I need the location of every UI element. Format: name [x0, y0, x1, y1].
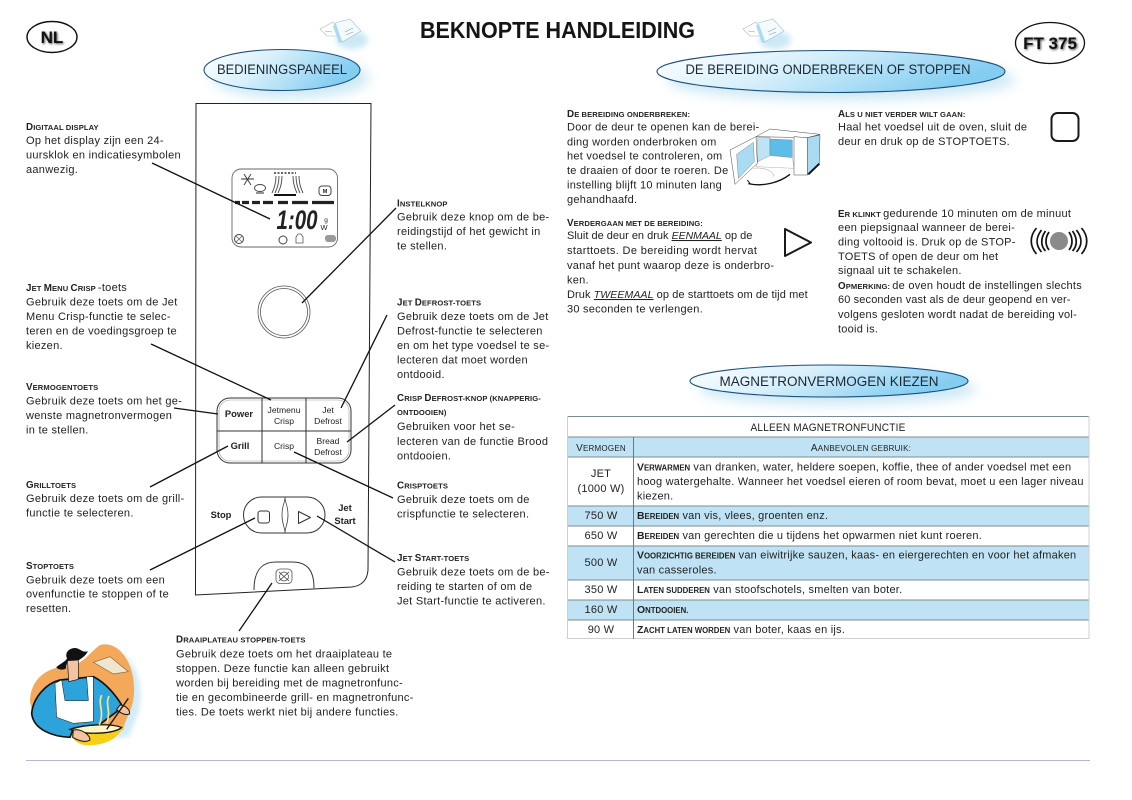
button block: Defrost: [314, 416, 342, 426]
stop and start buttons: Jet: [338, 502, 352, 513]
text: verdergaan met de bereiding: starttoets. De bereiding wordt hervat: [567, 245, 757, 257]
text: crisptoets: CRISPTOETS: [397, 480, 448, 492]
text: stoptoets: [26, 561, 169, 615]
heading pill: bedieningspaneel: BEDIENINGSPANEEL: [217, 62, 347, 78]
table: alleen magnetronfunctie: LATEN SUDDEREN van stoofschotels, smelten van boter.: [637, 584, 902, 596]
stop and start buttons: [211, 497, 356, 533]
text: digitaal display: [26, 122, 181, 176]
text: stoptoets: STOPTOETS: [26, 561, 74, 572]
text: vermogentoets: in te stellen.: [26, 424, 89, 436]
text: er klinkt: 60 seconden vast als de deur geopend en ver-: [838, 294, 1071, 306]
text: jet menu crisp-toets: kiezen.: [26, 340, 63, 352]
text: als u niet verder wilt gaan: deur en druk op de STOPTOETS.: [838, 136, 1010, 148]
table: alleen magnetronfunctie: ZACHT LATEN WORDEN van boter, kaas en ijs.: [637, 624, 845, 636]
text: vermogentoets: Gebruik deze toets om het ge-: [26, 396, 182, 408]
button block: [217, 398, 351, 463]
illustration: chef stirring a bowl: [30, 644, 141, 745]
text: jet menu crisp-toets: JET MENU CRISP -toets: [26, 282, 127, 294]
text: vermogentoets: [25, 382, 182, 436]
text: instelknop: reidingstijd of het gewicht in: [397, 226, 541, 238]
language badge: NL: NL: [41, 28, 63, 47]
icon: open book left: [320, 19, 368, 49]
text: instelknop: Gebruik deze knop om de be-: [397, 212, 550, 224]
icon: beep signal: [1031, 228, 1087, 254]
text: digitaal display: aanwezig.: [26, 164, 78, 176]
text: verdergaan met de bereiding: VERDERGAAN MET DE BEREIDING:: [567, 218, 703, 229]
text: draaiplateau stoppen-toets: ties. De toets werkt niet bij andere functies.: [176, 706, 399, 718]
display: g: [324, 217, 328, 224]
text: crisptoets: [397, 480, 530, 520]
text: crisptoets: crispfunctie te selecteren.: [397, 508, 529, 520]
text: als u niet verder wilt gaan: ALS U NIET VERDER WILT GAAN:: [838, 109, 965, 120]
text: jet defrost-toets: Defrost-functie te selecteren: [397, 326, 543, 338]
text: er klinkt: volgens gesloten wordt nadat de bereiding vol-: [838, 309, 1077, 321]
language badge: NL: NL: [42, 29, 64, 48]
text: crisp defrost-knop: CRISP DEFROST-KNOP (KNAPPERIG-: [397, 393, 541, 404]
icon: start triangle: [785, 229, 811, 256]
icon: stop square: [1052, 113, 1078, 141]
table: alleen magnetronfunctie: 650 W: [585, 530, 618, 542]
text: vermogentoets: wenste magnetronvermogen: [25, 410, 172, 422]
table: alleen magnetronfunctie: VERWARMEN van dranken, water, heldere soepen, koffie, thee of ander voedsel met een: [637, 462, 1071, 474]
text: er klinkt: ER KLINKT gedurende 10 minuten om de minuut: [838, 208, 1071, 220]
table: alleen magnetronfunctie: BEREIDEN van vis, vlees, groenten enz.: [637, 510, 828, 522]
text: jet start-toets: reiding te starten of om de: [397, 581, 532, 593]
turntable button: [254, 562, 314, 590]
table: alleen magnetronfunctie: VERMOGEN: [576, 443, 626, 454]
text: stoptoets: ovenfunctie te stoppen of te: [26, 588, 169, 600]
text: draaiplateau stoppen-toets: Gebruik deze toets om het draaiplateau te: [176, 648, 392, 660]
text: draaiplateau stoppen-toets: worden bij bereiding met de magnetronfunc-: [175, 678, 403, 690]
text: draaiplateau stoppen-toets: stoppen. Deze functie kan alleen gebruikt: [176, 663, 389, 675]
table: alleen magnetronfunctie: van casseroles.: [637, 564, 717, 576]
text: de bereiding onderbreken: het voedsel te controleren, om: [567, 150, 722, 162]
text: digitaal display: uursklok en indicatiesymbolen: [26, 150, 181, 162]
text: grilltoets: GRILLTOETS: [26, 480, 76, 491]
button block: Grill: [231, 440, 249, 451]
stop and start buttons: Stop: [211, 509, 232, 520]
model badge: FT 375: FT 375: [1024, 35, 1078, 54]
text: de bereiding onderbreken: instelling blijft 10 minuten lang: [567, 180, 722, 192]
text: als u niet verder wilt gaan: [838, 109, 1027, 148]
button block: Jetmenu: [268, 405, 301, 415]
text: jet start-toets: JET START-TOETS: [397, 553, 469, 564]
table row bands: [567, 416, 1089, 639]
text: jet defrost-toets: lecteren dat moet worden: [397, 354, 528, 366]
table: alleen magnetronfunctie: BEREIDEN van gerechten die u tijdens het opwarmen niet kunt roeren.: [637, 530, 982, 542]
text: stoptoets: Gebruik deze toets om een: [26, 574, 165, 586]
text: er klinkt: een piepsignaal wanneer de berei-: [838, 222, 1015, 234]
text: jet defrost-toets: [397, 298, 549, 381]
text: er klinkt: signaal uit te schakelen.: [838, 265, 962, 277]
text: de bereiding onderbreken: Door de deur te openen kan de berei-: [567, 122, 760, 134]
icon: open book right: [743, 19, 791, 49]
text: vermogentoets: VERMOGENTOETS: [26, 382, 98, 393]
heading pill: de bereiding onderbreken of stoppen: DE BEREIDING ONDERBREKEN OF STOPPEN: [686, 62, 970, 78]
table: alleen magnetronfunctie: JET: [591, 468, 611, 480]
text: jet start-toets: Gebruik deze toets om de be-: [397, 566, 550, 578]
text: er klinkt: ding voltooid is. Druk op de STOP-: [838, 236, 1016, 248]
text: instelknop: [397, 198, 550, 252]
text: jet start-toets: Jet Start-functie te activeren.: [397, 596, 546, 608]
text: crisp defrost-knop: lecteren van de functie Brood: [397, 436, 548, 448]
text: instelknop: INSTELKNOP: [397, 198, 448, 210]
text: crisp defrost-knop: [397, 393, 548, 462]
leader lines: [150, 163, 396, 631]
text: draaiplateau stoppen-toets: tie en gecombineerde grill- en magnetronfunc-: [176, 692, 414, 704]
knob: [258, 286, 310, 338]
text: verdergaan met de bereiding: ken.: [567, 274, 589, 286]
text: jet menu crisp-toets: teren en de voedingsgroep te: [26, 326, 177, 338]
table: alleen magnetronfunctie: 750 W: [585, 510, 618, 522]
text: jet defrost-toets: ontdooid.: [397, 369, 445, 381]
text: jet menu crisp-toets: [26, 282, 178, 352]
text: jet defrost-toets: JET DEFROST-TOETS: [397, 298, 481, 308]
text: grilltoets: [26, 480, 185, 520]
control panel drawing: [196, 104, 371, 595]
text: verdergaan met de bereiding: Druk TWEEMAAL op de starttoets om de tijd met: [567, 289, 808, 301]
text: jet menu crisp-toets: Gebruik deze toets om de Jet: [26, 296, 178, 308]
table: alleen magnetronfunctie: [567, 416, 1089, 639]
text: de bereiding onderbreken: DE BEREIDING ONDERBREKEN:: [567, 109, 690, 120]
button block: Jet: [322, 405, 334, 415]
stop and start buttons: Start: [334, 515, 356, 526]
text: draaiplateau stoppen-toets: DRAAIPLATEAU STOPPEN-TOETS: [176, 634, 306, 646]
text: crisp defrost-knop: ONTDOOIEN): [397, 408, 447, 417]
table: alleen magnetronfunctie: kiezen.: [637, 490, 673, 502]
button block: Defrost: [314, 447, 342, 457]
text: er klinkt: TOETS of open de deur om het: [838, 251, 998, 263]
text: als u niet verder wilt gaan: Haal het voedsel uit de oven, sluit de: [838, 122, 1027, 134]
display: M: [323, 189, 328, 195]
text: grilltoets: Gebruik deze toets om de grill-: [26, 493, 185, 505]
text: de bereiding onderbreken: te draaien of door te roeren. De: [567, 165, 728, 177]
table: alleen magnetronfunctie: 90 W: [588, 624, 615, 636]
button block: Bread: [317, 436, 340, 446]
text: digitaal display: Op het display zijn een 24-: [26, 135, 164, 147]
text: er klinkt: [838, 208, 1082, 336]
table: alleen magnetronfunctie: ONTDOOIEN.: [637, 605, 688, 616]
heading pill: bedieningspaneel: [204, 50, 369, 98]
table: alleen magnetronfunctie: 350 W: [585, 584, 618, 596]
text: crisptoets: Gebruik deze toets om de: [397, 494, 530, 506]
title: BEKNOPTE HANDLEIDING: [420, 17, 695, 43]
text: grilltoets: functie te selecteren.: [26, 508, 134, 520]
table: alleen magnetronfunctie: 500 W: [585, 557, 618, 569]
text: instelknop: te stellen.: [397, 240, 447, 252]
table: alleen magnetronfunctie: (1000 W): [578, 483, 624, 495]
text: jet defrost-toets: Gebruik deze toets om de Jet: [397, 311, 549, 323]
table: alleen magnetronfunctie: AANBEVOLEN GEBRUIK:: [811, 443, 911, 454]
table: alleen magnetronfunctie: ALLEEN MAGNETRONFUNCTIE: [750, 422, 906, 434]
text: jet menu crisp-toets: Menu Crisp-functie te selec-: [26, 311, 171, 323]
model badge: FT 375: [1016, 22, 1084, 64]
text: jet start-toets: [397, 553, 550, 608]
display: [232, 169, 338, 247]
button block: Crisp: [274, 416, 294, 426]
table: alleen magnetronfunctie: 160 W: [585, 604, 618, 616]
text: stoptoets: resetten.: [26, 603, 71, 615]
text: de bereiding onderbreken: ding worden onderbroken om: [567, 136, 717, 148]
model badge: FT 375: FT 375: [1023, 34, 1077, 53]
text: verdergaan met de bereiding: 30 seconden te verlengen.: [567, 304, 703, 316]
table: alleen magnetronfunctie: VOORZICHTIG BEREIDEN van eiwitrijke sauzen, kaas- en eiergerechten en voor het afmaken: [637, 550, 1076, 562]
text: crisp defrost-knop: ontdooien.: [397, 450, 451, 462]
language badge: NL: [27, 22, 77, 52]
table: alleen magnetronfunctie: hoog watergehalte. Wanneer het voedsel eieren of room bevat, moet u een lager niveau: [637, 476, 1084, 488]
panel outline: [196, 104, 371, 595]
text: de bereiding onderbreken: [567, 109, 760, 206]
text: digitaal display: DIGITAAL DISPLAY: [26, 122, 99, 133]
text: de bereiding onderbreken: gehandhaafd.: [567, 194, 637, 206]
heading pill: magnetronvermogen kiezen: MAGNETRONVERMOGEN KIEZEN: [720, 374, 938, 390]
illustration: open microwave: [730, 129, 820, 185]
text: er klinkt: tooid is.: [838, 324, 878, 336]
text: er klinkt: OPMERKING: de oven houdt de instellingen slechts: [838, 280, 1082, 292]
heading pill: de bereiding onderbreken of stoppen: [657, 50, 1015, 100]
text: verdergaan met de bereiding: [567, 218, 808, 316]
text: verdergaan met de bereiding: vanaf het punt waarop deze is onderbro-: [567, 260, 774, 272]
text: draaiplateau stoppen-toets: [175, 634, 414, 718]
button block: Crisp: [274, 441, 294, 451]
bottom rule: [26, 760, 1090, 762]
heading pill: magnetronvermogen kiezen: [690, 365, 977, 405]
display: W: [320, 223, 328, 232]
text: jet defrost-toets: en om het type voedsel te se-: [397, 340, 549, 352]
text: verdergaan met de bereiding: Sluit de deur en druk EENMAAL op de: [567, 230, 752, 242]
button block: Power: [225, 408, 253, 419]
display: 1:00: [276, 205, 318, 235]
text: crisp defrost-knop: Gebruiken voor het se-: [397, 421, 515, 433]
